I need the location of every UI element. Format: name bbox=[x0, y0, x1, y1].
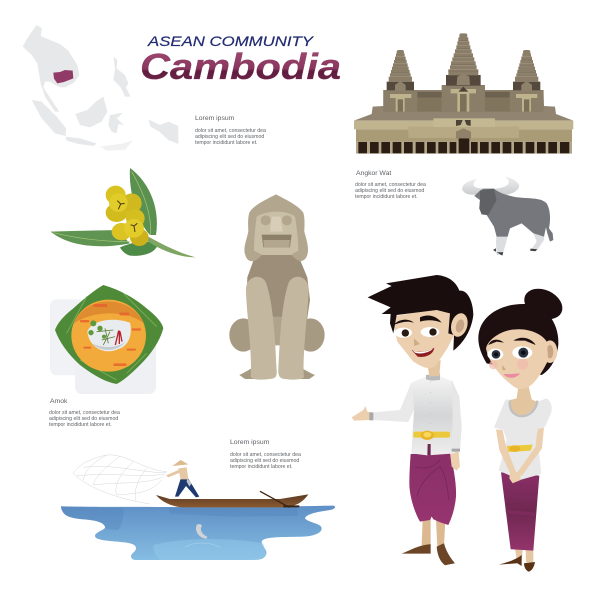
text block: map note bbox=[195, 115, 266, 146]
fishing scene bbox=[61, 455, 335, 560]
text block: Angkor Wat: tempor incididunt labore et. bbox=[355, 194, 418, 200]
text block: fishing note bbox=[230, 439, 301, 470]
amok dish bbox=[50, 285, 163, 394]
text block: map note: adipiscing elit sed do eiusmod bbox=[195, 134, 264, 140]
text block: Angkor Wat: adipiscing elit sed do eiusmod bbox=[355, 188, 424, 194]
text block: Amok: adipiscing elit sed do eiusmod bbox=[49, 416, 118, 422]
text block: fishing note: adipiscing elit sed do eiusmod bbox=[230, 458, 299, 464]
title: Cambodia bbox=[140, 46, 341, 87]
text block: Amok bbox=[49, 398, 120, 428]
Angkor Wat temple bbox=[354, 33, 573, 154]
title bbox=[140, 33, 341, 87]
text block: fishing note: tempor incididunt labore et. bbox=[230, 464, 293, 470]
text block: fishing note: dolor sit amet, consectetur dea bbox=[230, 452, 301, 458]
left tower bbox=[383, 50, 417, 112]
Cambodia highlighted bbox=[53, 70, 73, 83]
man in traditional dress bbox=[352, 275, 473, 565]
boat bbox=[156, 494, 308, 507]
text block: Angkor Wat: dolor sit amet, consectetur dea bbox=[355, 182, 426, 188]
text block: fishing note: Lorem ipsum bbox=[230, 439, 270, 446]
central tower bbox=[442, 33, 485, 112]
woman in traditional dress bbox=[478, 283, 567, 572]
flower: yellow blossoms on leaves bbox=[51, 168, 196, 257]
text block: map note: tempor incididunt labore et. bbox=[195, 140, 258, 146]
text block: Angkor Wat: Angkor Wat bbox=[356, 170, 391, 177]
text block: Amok: dolor sit amet, consectetur dea bbox=[49, 410, 120, 416]
text block: Amok: tempor incididunt labore et. bbox=[49, 422, 112, 428]
text block: Amok: Amok bbox=[50, 398, 68, 405]
casting net bbox=[73, 455, 167, 504]
title: ASEAN COMMUNITY bbox=[147, 33, 315, 49]
text block: Angkor Wat bbox=[355, 170, 426, 200]
map of Southeast Asia bbox=[23, 25, 178, 151]
water bbox=[61, 506, 335, 560]
text block: map note: dolor sit amet, consectetur dea bbox=[195, 128, 266, 134]
fish bbox=[196, 524, 207, 539]
garuda stone statue bbox=[229, 194, 325, 380]
fisherman bbox=[166, 460, 199, 497]
water buffalo bbox=[462, 177, 553, 256]
right tower bbox=[510, 50, 544, 112]
text block: map note: Lorem ipsum bbox=[195, 115, 235, 122]
